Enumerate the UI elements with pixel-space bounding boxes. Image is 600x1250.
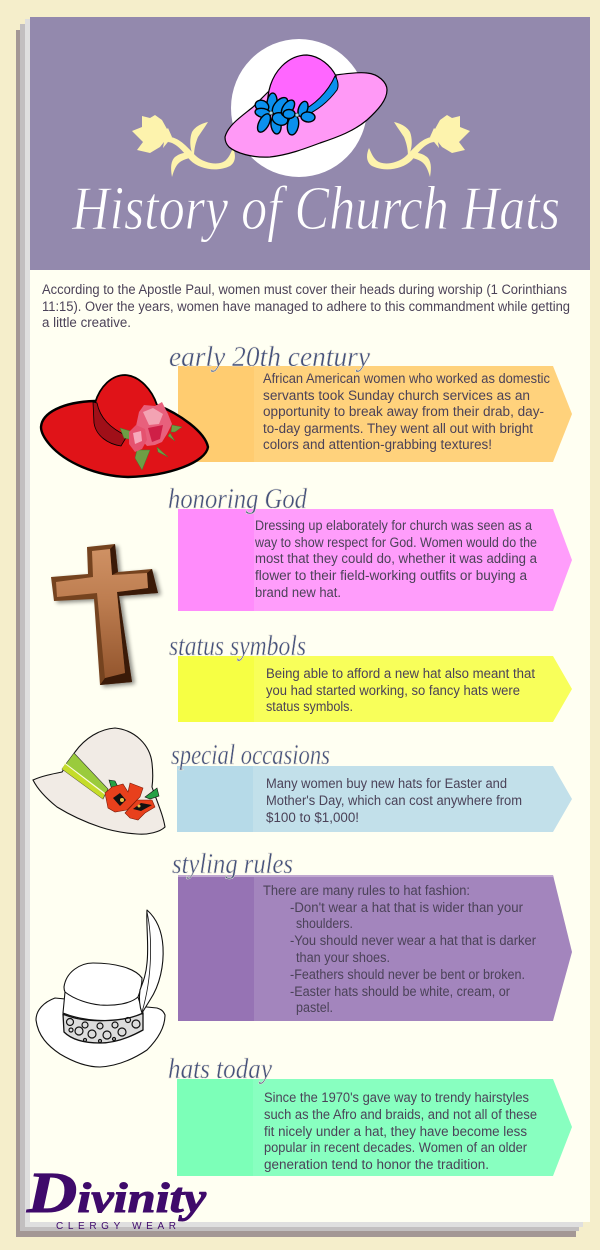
text: early 20th century [263, 371, 550, 452]
header banner [30, 17, 590, 270]
intro text: a little creative. [42, 315, 131, 330]
section: early 20th century [41, 342, 572, 477]
text: styling rules [263, 883, 536, 1015]
logo: Divinity Clergy Wear: Divinity [26, 1160, 206, 1225]
arrow banner: orange [178, 366, 572, 462]
text: hats today: such as the Afro and braids, and not all of these [264, 1107, 537, 1122]
text: early 20th century: opportunity to break away from their drab, day- [263, 404, 544, 419]
text: styling rules: pastel. [296, 1000, 333, 1015]
arrow banner: pink [178, 509, 572, 611]
text: hats today: Since the 1970's gave way to trendy hairstyles [264, 1090, 529, 1105]
text: early 20th century: colors and attention-grabbing textures! [263, 437, 492, 452]
text: status symbols: Being able to afford a new hat also meant that [266, 666, 535, 681]
text: styling rules: There are many rules to hat fashion: [263, 883, 470, 898]
text: early 20th century: African American women who worked as domestic [263, 371, 550, 386]
arrow banner: purple [178, 875, 572, 1021]
icon: cream hat with poppies [33, 728, 165, 834]
icon: red hat with roses [41, 375, 208, 477]
text: hats today: generation tend to honor the tradition. [264, 1157, 489, 1172]
heading: styling rules: styling rules [172, 849, 293, 880]
text: status symbols: you had started working, so fancy hats were [266, 683, 520, 698]
text: honoring God: way to show respect for God. Women would do the [254, 535, 537, 550]
text: styling rules: -Feathers should never be bent or broken. [290, 967, 525, 982]
text: styling rules: -Easter hats should be white, cream, or [290, 984, 510, 999]
text: hats today: fit nicely under a hat, they have become less [264, 1124, 527, 1139]
section: status symbols [169, 631, 572, 722]
text: special occasions: $100 to $1,000! [266, 810, 359, 825]
text: special occasions: Mother's Day, which can cost anywhere from [266, 793, 522, 808]
intro text: According to the Apostle Paul, women must cover their heads during worship (1 Corinthians [42, 282, 567, 297]
heading: early 20th century: early 20th century [169, 342, 371, 373]
text: hats today: popular in recent decades. Women of an older [264, 1140, 527, 1155]
section: honoring God [51, 484, 572, 687]
text: styling rules: -You should never wear a hat that is darker [290, 933, 536, 948]
arrow banner: green [177, 1079, 572, 1176]
text: styling rules: -Don't wear a hat that is wider than your [290, 900, 523, 915]
text: honoring God: most that they could do, whether it was adding a [255, 551, 537, 566]
section: styling rules [36, 849, 572, 1067]
icon: white hat with feather [36, 910, 165, 1067]
heading: honoring God: honoring God [168, 484, 308, 515]
heading: special occasions: special occasions [171, 740, 330, 771]
text: hats today [264, 1090, 537, 1172]
text: honoring God [254, 518, 537, 600]
text: special occasions: Many women buy new hats for Easter and [266, 776, 507, 791]
intro text [42, 282, 570, 330]
arrow banner: yellow [178, 656, 572, 722]
text: early 20th century: servants took Sunday church services as an [263, 388, 530, 403]
text: styling rules: shoulders. [296, 916, 353, 931]
icon: flourish left [132, 115, 235, 177]
text: special occasions [266, 776, 522, 825]
text: honoring God: brand new hat. [255, 585, 341, 600]
text: honoring God: flower to their field-working outfits or buying a [255, 568, 527, 583]
heading: status symbols: status symbols [169, 631, 306, 662]
icon: pink hat [225, 55, 387, 157]
heading: hats today: hats today [168, 1054, 273, 1085]
text: status symbols [266, 666, 535, 714]
text: honoring God: Dressing up elaborately for church was seen as a [255, 518, 532, 533]
section: hats today [168, 1054, 572, 1176]
text: early 20th century: to-day garments. They went all out with bright [263, 421, 533, 436]
arrow banner: blue [177, 766, 572, 832]
intro text: 11:15). Over the years, women have managed to adhere to this commandment while getting [42, 299, 570, 314]
section: special occasions [33, 728, 572, 834]
icon: flourish right [367, 115, 470, 177]
text: status symbols: status symbols. [266, 699, 353, 714]
icon: white oval [231, 39, 367, 177]
text: styling rules: than your shoes. [296, 950, 390, 965]
icon: wooden cross [51, 544, 161, 687]
logo: Divinity Clergy Wear: CLERGY WEAR [56, 1221, 176, 1232]
